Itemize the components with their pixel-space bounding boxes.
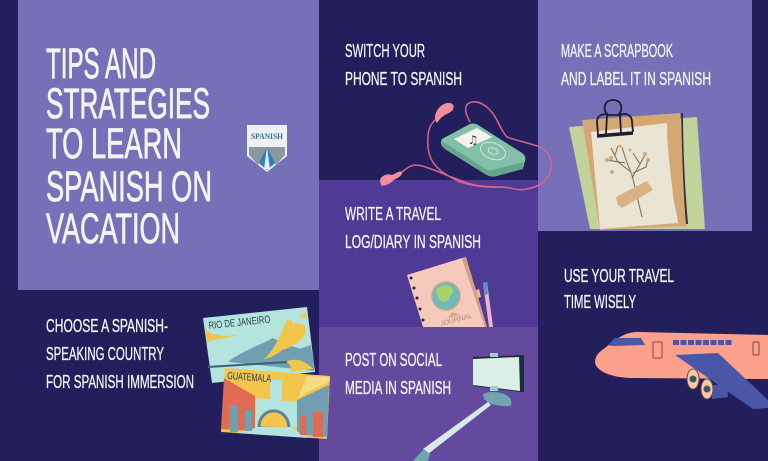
text: use your travel time (564, 266, 674, 312)
text: choose a country: SPEAKING COUNTRY (46, 344, 164, 364)
icon: airplane (595, 332, 768, 409)
icon: scrapbook with clip (569, 100, 705, 230)
icon: music player with earphones (380, 102, 551, 190)
text: use your travel time: USE YOUR TRAVEL (564, 266, 674, 286)
tape (616, 181, 653, 208)
cockpit window (608, 338, 645, 346)
text: choose a country: CHOOSE A SPANISH- (46, 316, 168, 336)
far engine (712, 385, 728, 399)
text: choose a country: FOR SPANISH IMMERSION (46, 372, 194, 392)
icon: postcards (203, 307, 330, 439)
left earbud (435, 103, 454, 123)
text: switch your phone (345, 41, 462, 89)
icon: travel journal with globe: JOURNAL (440, 313, 473, 328)
panel: write a travel log (319, 180, 538, 327)
text: make a scrapbook: MAKE A SCRAPBOOK (561, 41, 673, 61)
icon: school logo shield (247, 125, 287, 172)
title: SPANISH ON (46, 163, 212, 211)
cabin windows (673, 340, 732, 345)
postcard: Guatemala: GUATEMALA (227, 370, 272, 385)
title (46, 40, 212, 253)
text: switch your phone: SWITCH YOUR (345, 41, 425, 61)
text: make a scrapbook (561, 41, 711, 89)
text: post on social media (345, 350, 451, 398)
wing (675, 353, 768, 409)
earphone cable (428, 102, 551, 190)
panel: scrapbook (538, 0, 752, 231)
text: write a travel log: WRITE A TRAVEL (345, 204, 441, 224)
text: use your travel time: TIME WISELY (564, 292, 636, 312)
doors (653, 342, 662, 358)
title: TIPS AND (46, 40, 156, 88)
globe (432, 282, 460, 310)
right earbud (380, 171, 402, 186)
postcard: Rio de Janeiro: RIO DE JANEIRO (208, 314, 271, 332)
panel: title (18, 0, 319, 290)
icon: music note: ♫ (468, 133, 478, 147)
title: VACATION (46, 205, 180, 253)
text: post on social media: MEDIA IN SPANISH (345, 378, 451, 398)
icon: selfie stick with phone (413, 353, 524, 461)
text: choose a country (46, 316, 194, 392)
text: write a travel log: LOG/DIARY IN SPANISH (345, 232, 481, 252)
player body (441, 124, 525, 176)
engines (687, 369, 713, 399)
icon: school logo shield: SPANISH (251, 132, 284, 141)
text: post on social media: POST ON SOCIAL (345, 350, 442, 370)
fuselage (595, 332, 768, 379)
title: TO LEARN (46, 120, 182, 168)
text: switch your phone: PHONE TO SPANISH (345, 69, 462, 89)
pen (483, 282, 493, 327)
panel: post on social media (319, 327, 538, 461)
text: write a travel log (345, 204, 481, 252)
pressed plant (607, 146, 648, 217)
title: STRATEGIES (46, 80, 210, 128)
binder clip (597, 100, 633, 136)
icon: travel journal with globe (407, 257, 493, 328)
player screen (454, 128, 492, 148)
player wheel (478, 139, 508, 163)
